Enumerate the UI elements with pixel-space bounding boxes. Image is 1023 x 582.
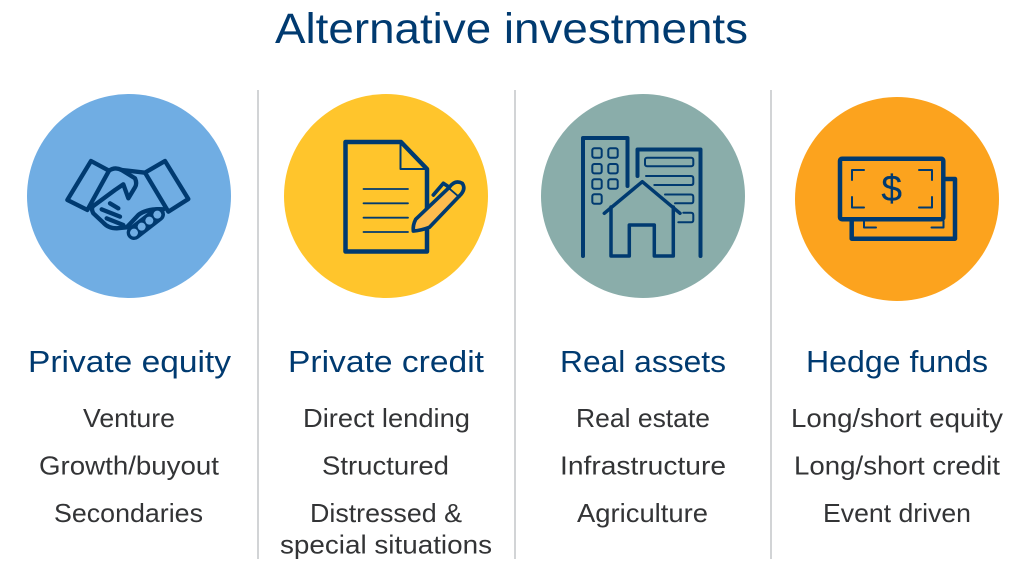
- heading: Private credit: [288, 344, 484, 379]
- list items: Agriculture: [577, 498, 708, 528]
- icon: dollar sign: $: [881, 168, 902, 209]
- list items: Venture: [83, 403, 175, 433]
- panel: real assets: [541, 94, 745, 528]
- icon: document and pen on yellow circle: [284, 94, 488, 298]
- icon: buildings and house on teal circle: [541, 94, 745, 298]
- list items: Infrastructure: [560, 450, 726, 480]
- list items: Direct lending: [303, 403, 470, 433]
- list items: Structured: [322, 450, 449, 480]
- list items: [560, 403, 726, 528]
- list items: [280, 403, 492, 560]
- title: Alternative investments: [275, 5, 748, 53]
- heading: Hedge funds: [806, 344, 988, 379]
- list items: Event driven: [823, 498, 971, 528]
- list items: Distressed &: [310, 498, 462, 528]
- panel: private equity: [27, 94, 232, 528]
- icon: banknotes on orange circle: [795, 97, 999, 301]
- heading: Private equity: [28, 344, 232, 379]
- list items: [39, 403, 220, 528]
- panel: private credit: [280, 94, 492, 560]
- list items: Real estate: [576, 403, 710, 433]
- list items: Long/short equity: [791, 403, 1003, 433]
- list items: Secondaries: [54, 498, 203, 528]
- panel: hedge funds: [791, 97, 1003, 528]
- list items: Long/short credit: [794, 450, 1001, 480]
- list items: special situations: [280, 530, 492, 560]
- icon: handshake on blue circle: [27, 94, 231, 298]
- list items: Growth/buyout: [39, 450, 220, 480]
- list items: [791, 403, 1003, 528]
- heading: Real assets: [560, 344, 726, 379]
